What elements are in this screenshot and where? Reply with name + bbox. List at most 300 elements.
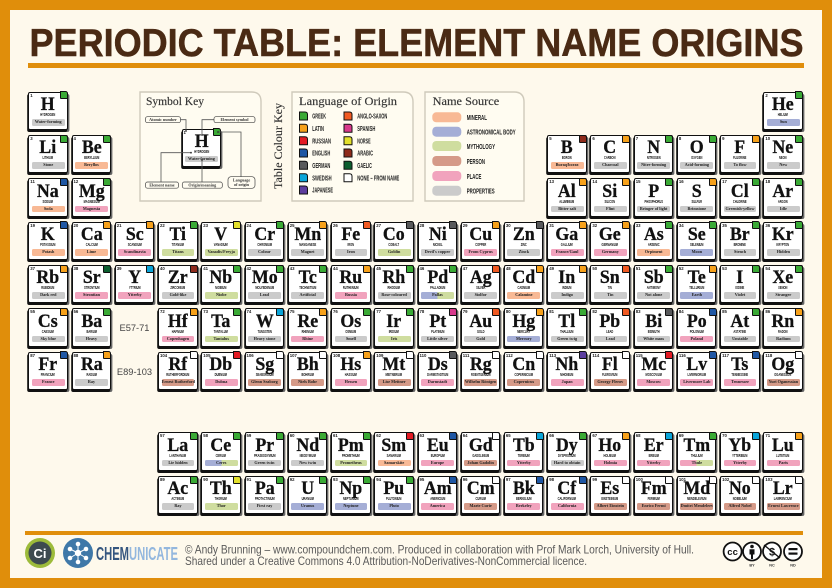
element: Bk: Berkeley xyxy=(516,503,532,508)
element: Eu: EUROPIUM xyxy=(430,453,444,458)
panel: language of origin: GAELIC xyxy=(357,161,372,170)
element: Au: GOLD xyxy=(477,329,484,334)
element: Pr: Green twin xyxy=(254,460,274,465)
element: Co xyxy=(374,222,414,260)
element: Sr xyxy=(72,265,111,303)
element: Hg xyxy=(504,308,543,347)
element: H: 1 xyxy=(30,93,33,98)
element: Xe xyxy=(763,265,803,303)
element: Nd: 60 xyxy=(290,433,294,438)
element: Si: 14 xyxy=(592,179,597,184)
element: Am: Am xyxy=(423,478,451,499)
element: Lr: Ernest Lawrence xyxy=(768,503,799,508)
element: Ar xyxy=(763,178,803,217)
element: Cd: Calamine xyxy=(515,292,532,297)
element: S: SULFUR xyxy=(691,199,702,204)
element: Sm: SAMARIUM xyxy=(387,453,401,458)
element: Co: COBALT xyxy=(389,242,399,247)
element: K: POTASSIUM xyxy=(40,242,56,247)
element: Sg: Sg xyxy=(255,354,274,375)
element: Pd: Pd xyxy=(427,267,448,288)
element: Mn: Magnet xyxy=(301,249,314,254)
panel: symbol key: Symbol Key xyxy=(146,96,204,108)
panel: name source: ASTRONOMICAL BODY xyxy=(467,127,516,136)
element: Hs: Hs xyxy=(340,354,361,375)
element: Ba: 56 xyxy=(74,309,78,314)
element: No: Alfred Nobel xyxy=(728,503,752,508)
element: Fe: Iron xyxy=(347,249,355,254)
element: Ir: IRIDIUM xyxy=(389,329,399,334)
element: Si: SILICON xyxy=(605,199,615,204)
element: Ru: Russia xyxy=(345,292,357,297)
key example cell: hydrogen: 1 xyxy=(184,130,186,135)
element: Tm: THULIUM xyxy=(691,453,703,458)
element: K: K xyxy=(41,224,55,245)
element: S: Brimstone xyxy=(688,206,706,211)
element: He xyxy=(763,92,803,130)
element: Mg xyxy=(72,178,111,217)
key leader lines and labels: Atomic number xyxy=(149,117,177,122)
element: N: NITROGEN xyxy=(647,155,660,160)
element: Te: 52 xyxy=(679,266,684,271)
element: F: F xyxy=(734,137,745,158)
element: V: V xyxy=(215,224,227,245)
element: Yb: Yb xyxy=(728,435,751,456)
element: Mt: 109 xyxy=(376,353,383,358)
element: Ds xyxy=(418,352,457,390)
element: La: 57 xyxy=(160,433,165,438)
element: Sb: Not alone xyxy=(645,292,662,297)
element: Fm: Fm xyxy=(641,478,666,499)
element: Ne: 10 xyxy=(765,136,770,141)
element: Cl: Greenish-yellow xyxy=(726,206,755,211)
element: Sb: Sb xyxy=(644,267,663,288)
element: Er: Er xyxy=(644,435,663,456)
element: Fl: FLEROVIUM xyxy=(602,372,618,377)
element: Db xyxy=(201,352,241,390)
element: V: VANADIUM xyxy=(214,242,228,247)
element: Rf: Ernest Rutherford xyxy=(162,379,195,384)
element: Po: POLONIUM xyxy=(690,329,704,334)
element: Be xyxy=(72,135,111,173)
element: Mt: Lise Meitner xyxy=(383,379,406,384)
element: Tl: 81 xyxy=(549,309,554,314)
element: Co: Goblin xyxy=(388,249,400,254)
element: At: 85 xyxy=(722,309,727,314)
element: Np: NEPTUNIUM xyxy=(343,496,359,501)
element: Rn: Rn xyxy=(772,311,795,332)
element: Rf: 104 xyxy=(160,353,167,358)
element: Rb: RUBIDIUM xyxy=(42,285,55,290)
element: Rh: Rh xyxy=(383,267,405,288)
element: Mn: 25 xyxy=(290,223,294,228)
element: U: 92 xyxy=(290,477,294,482)
element: Ne: NEON xyxy=(779,155,787,160)
element: Sn: 50 xyxy=(592,266,597,271)
element: Cn: Cn xyxy=(512,354,535,375)
element: Cn: 112 xyxy=(506,353,513,358)
element: N: 7 xyxy=(636,136,638,141)
element: Ga: 31 xyxy=(549,223,554,228)
element: Cl xyxy=(720,178,760,217)
element: Lr: LAWRENCIUM xyxy=(774,496,792,501)
element: Tb: Tb xyxy=(513,435,535,456)
element: Cu: From Cyprus xyxy=(469,249,493,254)
element: Hs: 108 xyxy=(333,353,340,358)
element: Ni xyxy=(418,222,457,260)
element: Pm: 61 xyxy=(333,433,338,438)
element: Cf: California xyxy=(558,503,576,508)
element: Sr: Strontian xyxy=(83,292,100,297)
element: Ti: 22 xyxy=(160,223,165,228)
element: Np xyxy=(331,476,370,514)
element: C: CARBON xyxy=(604,155,616,160)
element: Si: Si xyxy=(603,181,618,202)
element: Np: Neptune xyxy=(343,503,359,508)
element: Sm: Sm xyxy=(382,435,406,456)
element: Po: 84 xyxy=(679,309,684,314)
element: Re: Rhine xyxy=(302,336,313,341)
element: Cs: 55 xyxy=(30,309,35,314)
element: Mc: Mc xyxy=(641,354,666,375)
element: Tl: Green twig xyxy=(557,336,577,341)
element: Ga: France/Gaul xyxy=(556,249,578,254)
element: Hs xyxy=(331,352,370,390)
element: Rh: RHODIUM xyxy=(388,285,400,290)
element: Pd xyxy=(418,265,457,303)
element: Tc: Tc xyxy=(298,267,317,288)
element: Fr: 87 xyxy=(30,353,35,358)
element: Xe: Stranger xyxy=(775,292,791,297)
element: Fr xyxy=(28,352,68,390)
element: Mo: Lead xyxy=(260,292,269,297)
element: Ta: Ta xyxy=(211,311,231,332)
element: Pm: Pm xyxy=(338,435,364,456)
element: Bi: White mass xyxy=(643,336,664,341)
element: Mo: Mo xyxy=(251,267,277,288)
element: Ir xyxy=(374,308,414,347)
element: W: W xyxy=(255,311,273,332)
element: Cm: Marie Curie xyxy=(470,503,492,508)
element: Nd: NEODYMIUM xyxy=(299,453,316,458)
element: W: TUNGSTEN xyxy=(257,329,271,334)
element: Pm: Prometheus xyxy=(340,460,362,465)
element: Ds: 110 xyxy=(420,353,426,358)
element: U: URANIUM xyxy=(301,496,314,501)
element: Tm xyxy=(677,432,716,471)
element: Ce: Ce xyxy=(211,435,231,456)
key example cell: hydrogen: HYDROGEN xyxy=(194,149,209,154)
element: P: 15 xyxy=(636,179,640,184)
panel: language of origin: RUSSIAN xyxy=(312,136,331,145)
element: P: PHOSPHORUS xyxy=(644,199,663,204)
element: Lv: Lv xyxy=(686,354,707,375)
element: As: As xyxy=(644,224,663,245)
element: Ce: 58 xyxy=(203,433,208,438)
element: Es xyxy=(590,476,630,514)
element: Tm: Tm xyxy=(683,435,710,456)
element: Na: Soda xyxy=(44,206,53,211)
element: Ge: 32 xyxy=(592,223,597,228)
element: Os xyxy=(331,308,370,347)
element: Es: EINSTEINIUM xyxy=(602,496,619,501)
element: Al: 13 xyxy=(549,179,554,184)
element: Ag: Siolfor xyxy=(475,292,487,297)
element: Md: Dmitri Mendeleev xyxy=(681,503,713,508)
element: N: N xyxy=(647,137,660,158)
element: Kr: 36 xyxy=(765,223,770,228)
footer rule xyxy=(25,531,803,535)
element: Dy: Dy xyxy=(556,435,578,456)
element: O: 8 xyxy=(679,136,681,141)
credits text: © Andy Brunning – www.compoundchem.com. Produced in collaboration with Prof Mark Lorch, University of Hull. xyxy=(185,542,694,556)
element: Tm: Thule xyxy=(692,460,702,465)
title rule xyxy=(28,62,804,68)
element: Zn: 30 xyxy=(506,223,511,228)
element: Am: AMERICIUM xyxy=(430,496,445,501)
element: V: Vanadis/Freyja xyxy=(208,249,235,254)
element: W: Heavy stone xyxy=(254,336,275,341)
element: He: HELIUM xyxy=(778,112,788,117)
element: Cl: CHLORINE xyxy=(733,199,747,204)
element: Mc: Moscow xyxy=(646,379,661,384)
element: Sn xyxy=(590,265,630,303)
element: Db: Db xyxy=(210,354,232,375)
element: Os: Smell xyxy=(346,336,356,341)
element: U xyxy=(288,476,327,514)
element: Db: Dubna xyxy=(215,379,227,384)
element: Pr: PRASEODYMIUM xyxy=(253,453,275,458)
element: F xyxy=(720,135,760,173)
element: B: B xyxy=(561,137,573,158)
element: Yb: YTTERBIUM xyxy=(732,453,747,458)
element: Mg: 12 xyxy=(74,179,78,184)
element: Pb: 82 xyxy=(592,309,597,314)
element: Mc xyxy=(634,352,673,390)
element: Tc: Artificial xyxy=(300,292,316,297)
element: Es: Es xyxy=(601,478,620,499)
element: Ir: 77 xyxy=(376,309,381,314)
element: Hf: HAFNIUM xyxy=(172,329,184,334)
element: Ce: Ceres xyxy=(216,460,226,465)
element: Pt xyxy=(418,308,457,347)
element: Hg: MERCURY xyxy=(517,329,530,334)
element: Li: Li xyxy=(40,137,56,158)
element: Th: 90 xyxy=(203,477,208,482)
element: Al: Al xyxy=(558,181,576,202)
element: Ca: Ca xyxy=(80,224,102,245)
element: Os: Os xyxy=(340,311,361,332)
element: Yb xyxy=(720,432,760,471)
element: Sb: 51 xyxy=(636,266,640,271)
element: Be: Beryllos xyxy=(84,162,99,167)
element: Se xyxy=(677,222,716,260)
element: Tb: TERBIUM xyxy=(518,453,530,458)
panel: language of origin: SPANISH xyxy=(357,124,375,133)
element: Zr: Gold-like xyxy=(170,292,186,297)
element: Cu: COPPER xyxy=(475,242,486,247)
element: Br: Br xyxy=(730,224,750,245)
element: Og: Og xyxy=(772,354,795,375)
element: At xyxy=(720,308,760,347)
element: Np: 93 xyxy=(333,477,338,482)
element: Pt: Little silver xyxy=(427,336,448,341)
element: Nb: 41 xyxy=(203,266,208,271)
element: Ne: Ne xyxy=(773,137,794,158)
element: Pu: Pu xyxy=(384,478,404,499)
element: Sr: Sr xyxy=(82,267,100,288)
element: Es: Albert Einstein xyxy=(597,503,624,508)
element: Es: 99 xyxy=(592,477,597,482)
element: La: Lie hidden xyxy=(168,460,188,465)
element: K xyxy=(28,222,68,260)
element: Tc: TECHNETIUM xyxy=(299,285,316,290)
element: Rf: RUTHERFORDIUM xyxy=(166,372,189,377)
element: Ir: Iris xyxy=(391,336,397,341)
element: Rg: ROENTGENIUM xyxy=(471,372,490,377)
element: Ta: TANTALUM xyxy=(214,329,228,334)
element: Cm: CURIUM xyxy=(475,496,486,501)
element: Os: 76 xyxy=(333,309,338,314)
panel: language of origin: GREEK xyxy=(312,112,326,121)
element: Pa: 91 xyxy=(246,477,251,482)
element: Ra: RADIUM xyxy=(86,372,96,377)
element: Fr: FRANCIUM xyxy=(41,372,55,377)
element: Br: BROMINE xyxy=(734,242,746,247)
element: Fl: Fl xyxy=(602,354,618,375)
key example cell: hydrogen xyxy=(182,128,221,167)
element: Am: 95 xyxy=(420,477,424,482)
element: H: Water-forming xyxy=(35,119,62,124)
element: Hg: 80 xyxy=(506,309,511,314)
element: Pt: Pt xyxy=(429,311,446,332)
element: Th: THORIUM xyxy=(215,496,227,501)
element: Li: LITHIUM xyxy=(43,155,53,160)
element: Dy: Hard to obtain xyxy=(554,460,580,465)
icons: creative commons licence: NC xyxy=(769,564,775,568)
element: Pt: 78 xyxy=(420,309,424,314)
element: Lu: 71 xyxy=(765,433,770,438)
element: Lr xyxy=(763,476,803,514)
element: Xe: XENON xyxy=(778,285,788,290)
element: Fe: IRON xyxy=(347,242,354,247)
key leader lines and labels: Origin/meaning xyxy=(188,182,216,187)
element: Mg: Mg xyxy=(78,181,104,202)
element: Fe: Fe xyxy=(341,224,360,245)
element: Ca: CALCIUM xyxy=(85,242,97,247)
element: Pr: 59 xyxy=(246,433,251,438)
element: Ac xyxy=(158,476,198,514)
element: Rg: Rg xyxy=(470,354,491,375)
element: Tc: 43 xyxy=(290,266,294,271)
element: F: FLUORINE xyxy=(733,155,747,160)
element: Tl: Tl xyxy=(558,311,575,332)
element: Bh: BOHRIUM xyxy=(301,372,314,377)
element: Ge: Germany xyxy=(602,249,619,254)
element: Lv: LIVERMORIUM xyxy=(687,372,706,377)
element: Mo: MOLYBDENUM xyxy=(255,285,274,290)
panel: language of origin: NORSE xyxy=(357,136,371,145)
element: Bk xyxy=(504,476,543,514)
element: Cd: CADMIUM xyxy=(517,285,530,290)
element: Te: TELLURIUM xyxy=(689,285,704,290)
element: Ge: Ge xyxy=(599,224,621,245)
element: Rh: 45 xyxy=(376,266,381,271)
element: Ne xyxy=(763,135,803,173)
element: Ra: Ray xyxy=(88,379,95,384)
element: Ne: New xyxy=(779,162,787,167)
panel: name source: PROPERTIES xyxy=(467,186,495,195)
element: Ho: 67 xyxy=(592,433,597,438)
element: Mo xyxy=(244,265,284,303)
element: Bi: BISMUTH xyxy=(647,329,659,334)
element: He: Sun xyxy=(780,119,787,124)
element: I: 53 xyxy=(722,266,727,271)
element: Ho: HOLMIUM xyxy=(604,453,616,458)
element: Ti: Titans xyxy=(172,249,184,254)
element: Ca: Lime xyxy=(87,249,96,254)
element: Co: 27 xyxy=(376,223,381,228)
element: Bi xyxy=(634,308,673,347)
element: Cr: Cr xyxy=(254,224,275,245)
element: At: ASTATINE xyxy=(734,329,746,334)
element: Db: DUBNIUM xyxy=(215,372,227,377)
element: Mo: 42 xyxy=(246,266,251,271)
element: Zn xyxy=(504,222,543,260)
element: Nh: NIHONIUM xyxy=(560,372,574,377)
title: PERIODIC TABLE: ELEMENT NAME ORIGINS xyxy=(30,22,804,65)
element: Bk: BERKELIUM xyxy=(516,496,531,501)
element: Cn: COPERNICIUM xyxy=(514,372,533,377)
element: Ru: 44 xyxy=(333,266,338,271)
element: U: Uranus xyxy=(301,503,314,508)
element: Cn: Copernicus xyxy=(514,379,534,384)
element: Cf xyxy=(547,476,587,514)
element: Cr: CHROMIUM xyxy=(257,242,272,247)
element: Li: Stone xyxy=(43,162,53,167)
element: Ts: Tennessee xyxy=(731,379,749,384)
element: Ta: Tantalus xyxy=(214,336,229,341)
element: Sc: SCANDIUM xyxy=(128,242,142,247)
element: Xe: Xe xyxy=(773,267,794,288)
element: Tc xyxy=(288,265,327,303)
element: Ge xyxy=(590,222,630,260)
element: Sc: Sc xyxy=(126,224,143,245)
element: N: Nitre-forming xyxy=(641,162,666,167)
element: Ru: Ru xyxy=(339,267,362,288)
element: Pu xyxy=(374,476,414,514)
element: I: I xyxy=(736,267,743,288)
element: In: In xyxy=(558,267,575,288)
element: Cl: Cl xyxy=(731,181,749,202)
element: Mg: Magnesia xyxy=(83,206,100,211)
element: Lu xyxy=(763,432,803,471)
element: Cr: 24 xyxy=(246,223,251,228)
element: Re xyxy=(288,308,327,347)
element: Bh: 107 xyxy=(290,353,297,358)
element: Gd: GADOLINIUM xyxy=(472,453,489,458)
element: Og: Yuri Oganessian xyxy=(769,379,798,384)
element: Ti: Ti xyxy=(169,224,186,245)
icons: creative commons licence: $ xyxy=(769,546,775,558)
element: Ni: Devil's copper xyxy=(425,249,450,254)
element: Ag: 47 xyxy=(463,266,467,271)
element: Nb xyxy=(201,265,241,303)
element: Ra xyxy=(72,352,111,390)
element: Gd: Gd xyxy=(469,435,492,456)
element: Ar: Idle xyxy=(780,206,787,211)
element: Ca xyxy=(72,222,111,260)
